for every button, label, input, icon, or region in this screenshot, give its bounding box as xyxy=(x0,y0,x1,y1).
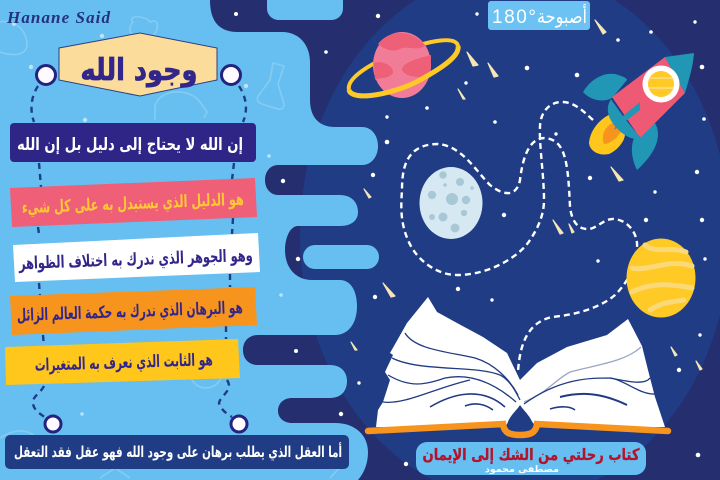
bar 5: yellow statement xyxy=(5,339,240,385)
background: light blue wavy left panel xyxy=(0,0,378,480)
bar 3: white statement: وهو الجوهر الذي ندرك به اختلاف الظواهر xyxy=(18,246,253,274)
watermark icons xyxy=(0,17,345,478)
title badge xyxy=(59,33,217,96)
book title label: كتاب رحلتي من الشك إلى الإيمان xyxy=(422,445,640,465)
bar 2: pink statement: هو الدليل الذي يستبدل به على كل شيء xyxy=(22,190,244,218)
book page lines xyxy=(383,333,655,410)
bar 1: navy statement: إن الله لا يحتاج إلى دليل بل إن الله xyxy=(17,135,243,155)
book cover xyxy=(368,424,668,435)
moon xyxy=(420,167,482,239)
rocket xyxy=(583,53,694,170)
planet ring front xyxy=(349,46,458,96)
book title label: مصطفى محمود xyxy=(485,465,559,475)
title badge: وجود الله xyxy=(80,53,198,88)
bar 1: navy statement xyxy=(10,123,256,162)
ringed planet xyxy=(349,32,458,98)
dashed connector: left rope xyxy=(31,86,46,418)
bar 4: orange statement: هو البرهان الذي ندرك به حكمة العالم الزائل xyxy=(17,298,243,326)
book title label xyxy=(416,442,646,475)
dashed flight path xyxy=(401,102,637,372)
book spine teardrop xyxy=(507,406,533,430)
bar 6: conclusion: أما العقل الذي يطلب برهان على وجود الله فهو عقل فقد التعقل xyxy=(14,442,342,462)
top label xyxy=(488,1,590,30)
planet ring back xyxy=(349,40,458,90)
bar 6: conclusion xyxy=(5,435,349,469)
background: light blue top tab xyxy=(267,0,343,20)
bar 2: pink statement xyxy=(10,178,257,227)
background: light blue pill xyxy=(303,245,379,269)
open book xyxy=(368,297,668,435)
yellow planet xyxy=(626,238,696,318)
bar 5: yellow statement: هو الثابت الذي نعرف به المتغيرات xyxy=(35,350,213,376)
bar 3: white statement xyxy=(13,233,260,282)
meteors xyxy=(351,20,702,370)
author name: Hanane Said xyxy=(6,8,110,27)
dashed connector: right rope xyxy=(219,86,246,417)
top label: أصبوحة xyxy=(537,4,587,28)
top label: 180° xyxy=(492,7,536,28)
bar 4: orange statement xyxy=(10,287,257,335)
circle nodes xyxy=(36,66,247,432)
background: blue oval behind illustrations xyxy=(300,0,720,480)
